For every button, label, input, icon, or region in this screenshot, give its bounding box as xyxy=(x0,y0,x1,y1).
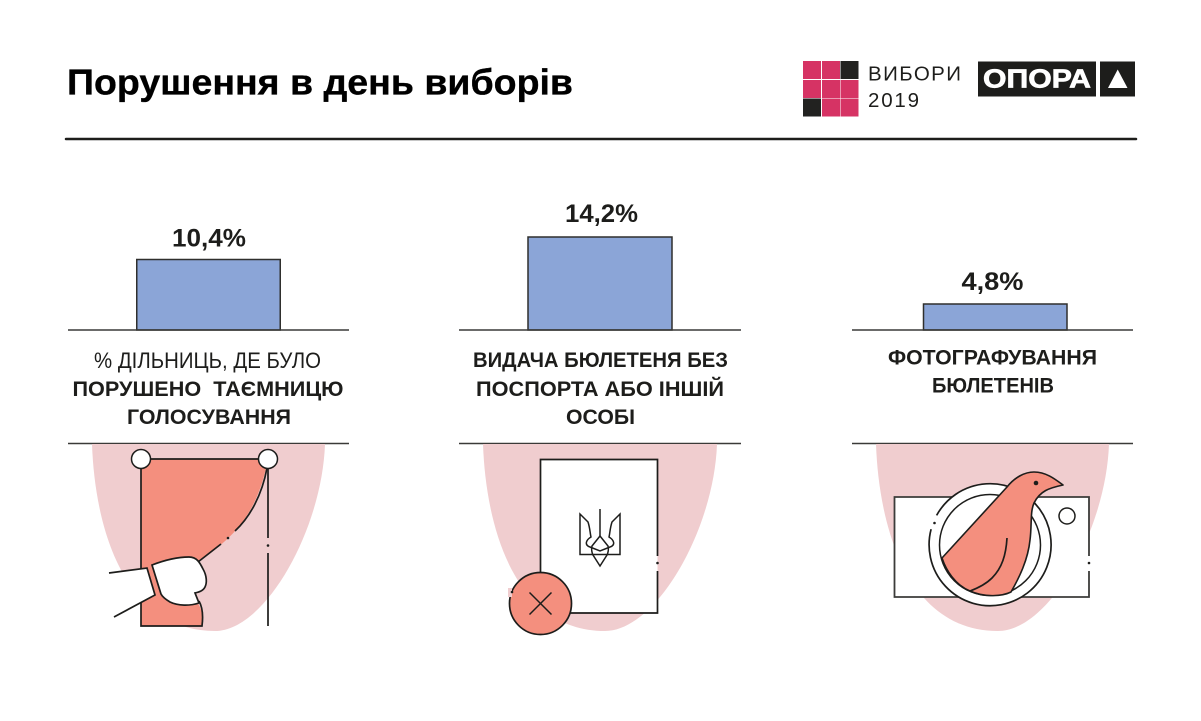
bar xyxy=(528,237,672,330)
caption: БЮЛЕТЕНІВ xyxy=(932,374,1054,398)
logo grid xyxy=(803,61,858,116)
value label: 10,4% xyxy=(172,224,246,252)
icon: camera with bird xyxy=(894,472,1090,606)
value label: 4,8% xyxy=(962,268,1024,296)
value label: 14,2% xyxy=(565,200,638,228)
logo text xyxy=(868,62,961,112)
icon: hand xyxy=(152,557,206,605)
caption: ОСОБІ xyxy=(566,405,635,429)
bar xyxy=(924,304,1067,330)
icon: curtain booth xyxy=(109,450,278,626)
caption: ГОЛОСУВАННЯ xyxy=(127,405,291,429)
caption xyxy=(72,348,344,429)
caption: ПОСПОРТА АБО ІНШІЙ xyxy=(476,376,724,401)
logo text: ВИБОРИ xyxy=(868,62,961,86)
icon: bird xyxy=(942,472,1063,596)
title: Порушення в день виборів xyxy=(67,62,573,102)
icon: ballot paper xyxy=(508,460,659,634)
caption xyxy=(473,348,728,429)
logo text: 2019 xyxy=(868,89,919,112)
caption xyxy=(888,346,1097,398)
background blob xyxy=(876,444,1109,631)
icon: trident xyxy=(580,509,620,566)
icon: sleeve xyxy=(109,568,155,617)
caption: ФОТОГРАФУВАННЯ xyxy=(888,346,1097,370)
panel: ballot without passport xyxy=(459,200,741,634)
logo: OPORA: ОПОРА xyxy=(983,64,1091,94)
panel: photographing ballots xyxy=(852,268,1133,631)
logo: elections 2019 xyxy=(803,61,961,116)
bar xyxy=(137,260,280,330)
caption: % ДІЛЬНИЦЬ, ДЕ БУЛО xyxy=(94,348,321,373)
header divider xyxy=(66,138,1136,140)
background blob xyxy=(92,444,325,631)
caption: ВИДАЧА БЮЛЕТЕНЯ БЕЗ xyxy=(473,348,728,372)
logo: OPORA xyxy=(978,62,1135,96)
background blob xyxy=(483,444,717,631)
caption: ПОРУШЕНО ТАЄМНИЦЮ xyxy=(72,377,344,401)
panel: ballot secrecy xyxy=(68,224,349,631)
icon: rejected mark xyxy=(508,572,572,634)
